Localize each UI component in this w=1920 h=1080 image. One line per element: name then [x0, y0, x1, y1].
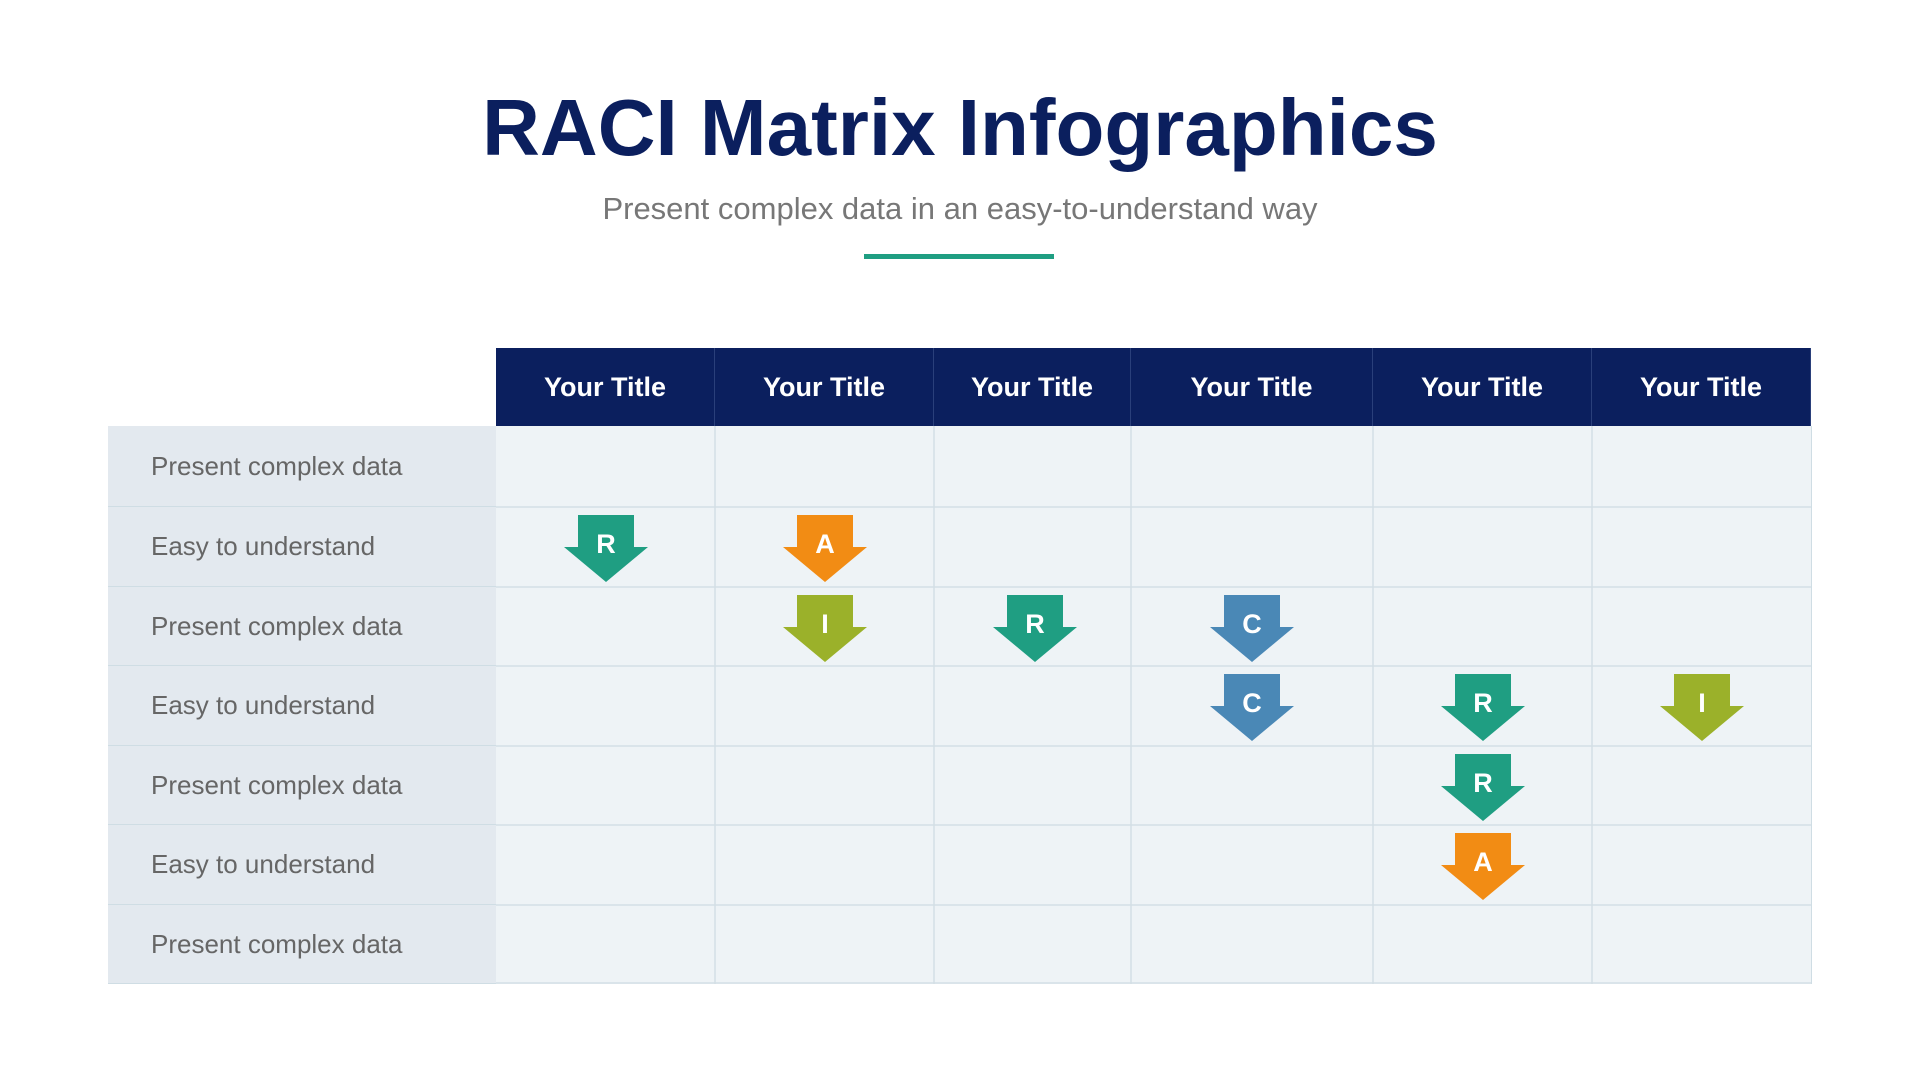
row labels: Present complex data [151, 450, 402, 480]
row labels: Present complex data [151, 928, 402, 958]
header row [496, 348, 1811, 426]
arrow R row2 col1 [564, 515, 648, 582]
row labels: Easy to understand [151, 849, 375, 879]
arrow R row2 col1: R [596, 529, 616, 559]
arrow A row2 col2 [783, 515, 867, 582]
title: RACI Matrix Infographics [482, 83, 1438, 172]
arrow I row3 col2: I [821, 609, 829, 639]
arrow C row3 col4 [1210, 595, 1294, 662]
arrow A row6 col5: A [1473, 847, 1493, 877]
arrow R row5 col5 [1441, 754, 1525, 821]
arrow A row6 col5 [1441, 833, 1525, 900]
arrow C row4 col4: C [1242, 688, 1262, 718]
row labels: Easy to understand [151, 690, 375, 720]
divider accent [864, 254, 1054, 259]
arrow R row3 col3 [993, 595, 1077, 662]
arrow R row5 col5: R [1473, 768, 1493, 798]
grid cells [496, 426, 1812, 984]
subtitle: Present complex data in an easy-to-understand way [602, 191, 1318, 226]
row labels [108, 426, 496, 984]
arrow I row4 col6 [1660, 674, 1744, 741]
arrow I row4 col6: I [1698, 688, 1706, 718]
arrow R row4 col5: R [1473, 688, 1493, 718]
arrow R row3 col3: R [1025, 609, 1045, 639]
arrow A row2 col2: A [815, 529, 835, 559]
header row: Your Title [763, 372, 885, 402]
header row: Your Title [1190, 372, 1312, 402]
arrow R row4 col5 [1441, 674, 1525, 741]
arrow C row3 col4: C [1242, 609, 1262, 639]
arrow I row3 col2 [783, 595, 867, 662]
header row: Your Title [971, 372, 1093, 402]
arrow C row4 col4 [1210, 674, 1294, 741]
header row: Your Title [1640, 372, 1762, 402]
row labels: Easy to understand [151, 531, 375, 561]
header row: Your Title [544, 372, 666, 402]
header row: Your Title [1421, 372, 1543, 402]
row labels: Present complex data [151, 610, 402, 640]
row labels: Present complex data [151, 770, 402, 800]
